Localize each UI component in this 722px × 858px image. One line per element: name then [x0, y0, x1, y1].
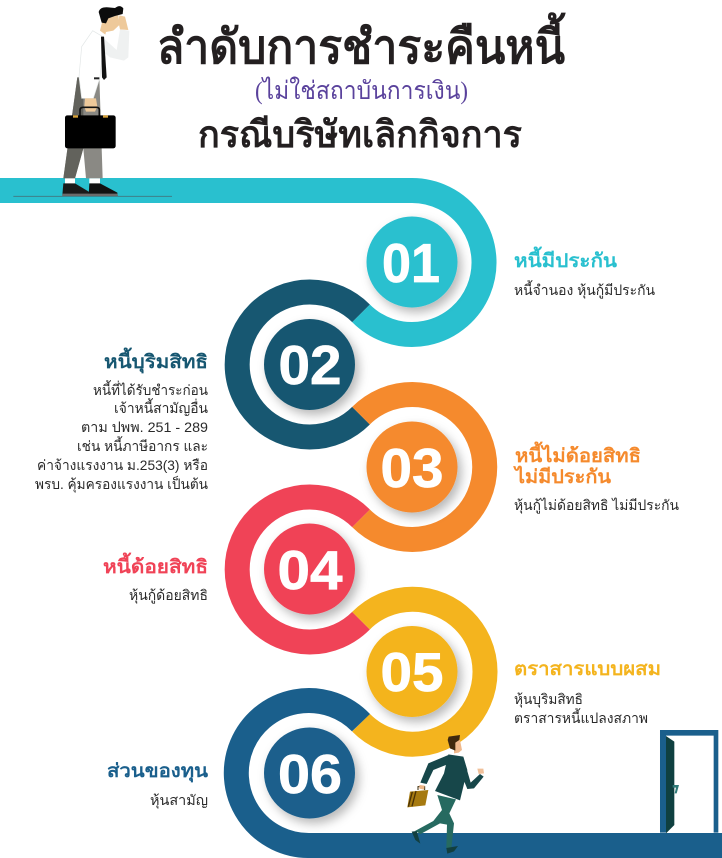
label 05 heading: ตราสารแบบผสม [514, 659, 661, 680]
badge 04: 04 [278, 539, 343, 601]
label 02 description: ตาม ปพพ. 251 - 289 [81, 419, 208, 435]
label 02 description: หนี้ที่ได้รับชำระก่อน [93, 380, 208, 398]
badge 05: 05 [380, 641, 444, 703]
illustration: worried businessman with briefcase [13, 6, 172, 196]
heading: line 1: ลำดับการชำระคืนหนี้ [157, 12, 566, 74]
text block 03 [513, 441, 679, 514]
label 06 description: หุ้นสามัญ [150, 792, 208, 809]
label 06 heading: ส่วนของทุน [107, 761, 208, 783]
label 02 description: พรบ. คุ้มครองแรงงาน เป็นต้น [35, 475, 208, 493]
label 05 description [514, 691, 648, 726]
segment 3 ring [361, 394, 485, 540]
badge 05 [366, 626, 458, 717]
badge 06 [264, 728, 355, 818]
label 02 description: เจ้าหนี้สามัญอื่น [114, 398, 208, 416]
label 02 description [35, 380, 208, 493]
badge 01: 01 [382, 232, 440, 294]
text block 02 [35, 347, 208, 493]
text block 05 [514, 659, 661, 726]
illustration: exit door [660, 730, 718, 833]
heading: line 2: กรณีบริษัทเลิกกิจการ [198, 115, 522, 156]
badge 06: 06 [278, 743, 342, 805]
label 01 description: หนี้จำนอง หุ้นกู้มีประกัน [514, 280, 655, 299]
badge 02 [264, 319, 355, 410]
label 04 description: หุ้นกู้ด้อยสิทธิ [129, 587, 208, 604]
segment 6 path [236, 701, 722, 846]
segment 2 ring [237, 292, 361, 437]
segment 4 ring [237, 497, 361, 642]
badge 01 [366, 216, 458, 308]
illustration: businessman running to the door [407, 735, 484, 854]
text block 01 [514, 246, 655, 299]
text block 04 [103, 552, 208, 604]
subheading: (ไม่ใช่สถาบันการเงิน) [255, 76, 468, 105]
badge 03 [366, 422, 458, 512]
badge 02: 02 [278, 334, 342, 396]
label 05 description: หุ้นบุริมสิทธิ [514, 691, 583, 708]
label 03 heading: ไม่มีประกัน [513, 465, 611, 488]
label 02 description: เช่น หนี้ภาษีอากร และ [77, 436, 208, 454]
label 02 heading: หนี้บุริมสิทธิ [104, 347, 208, 374]
label 01 heading: หนี้มีประกัน [514, 246, 617, 272]
label 02 description: ค่าจ้างแรงงาน ม.253(3) หรือ [37, 457, 208, 473]
segment 1 path [0, 190, 484, 334]
label 03 description: หุ้นกู้ไม่ด้อยสิทธิ ไม่มีประกัน [514, 497, 679, 514]
label 04 heading: หนี้ด้อยสิทธิ [103, 552, 208, 578]
label 03 heading: หนี้ไม่ด้อยสิทธิ [515, 441, 641, 467]
segment 5 ring [361, 599, 485, 744]
badge 04 [264, 524, 355, 614]
title block [157, 12, 566, 156]
badge 03: 03 [380, 437, 444, 499]
text block 06 [107, 761, 208, 809]
label 05 description: ตราสารหนี้แปลงสภาพ [514, 708, 648, 726]
label 03 heading [513, 441, 641, 488]
